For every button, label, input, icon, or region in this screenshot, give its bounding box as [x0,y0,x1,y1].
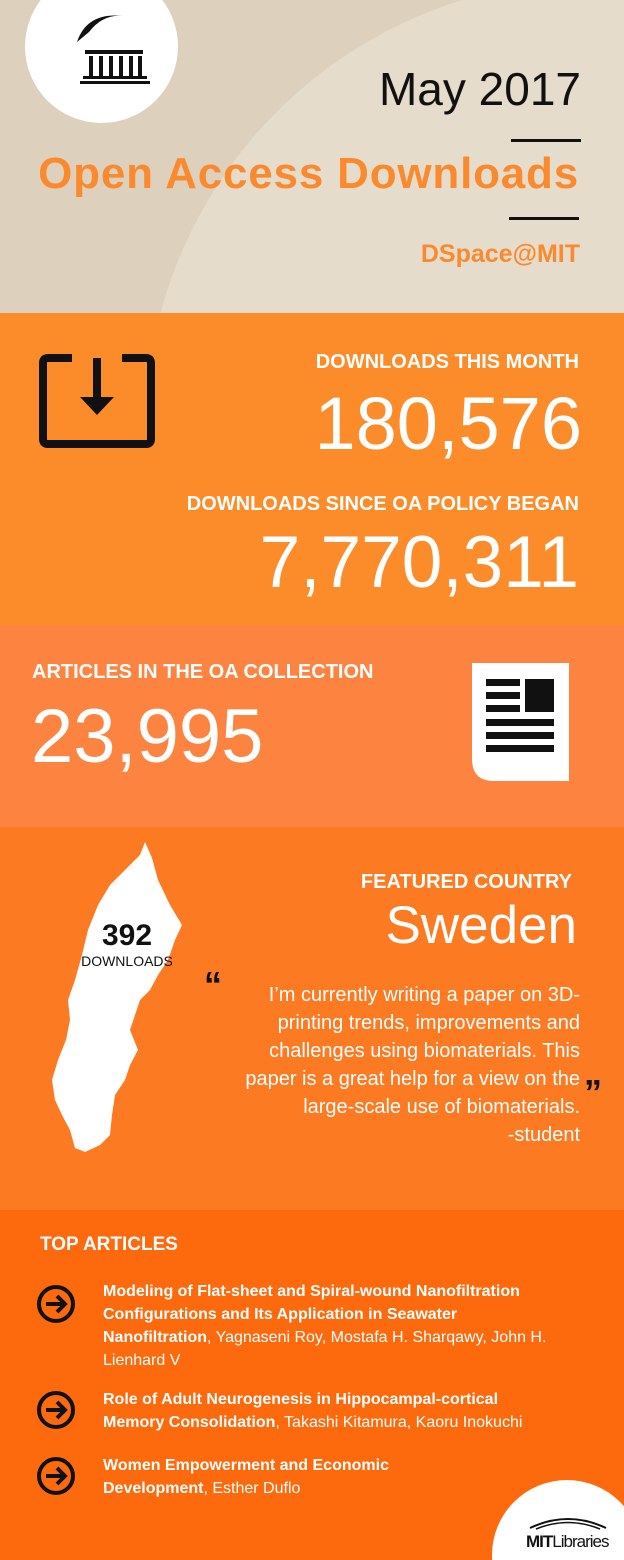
panel: featured country: ” [584,1072,602,1113]
article 1: Modeling of Flat-sheet and Spiral-wound Nanofiltration Configurations and Its Application in Seawater Nanofiltration, Yagnaseni Roy, Mostafa H. Sharqawy, John H. Lienhard V [103,1283,546,1369]
stat: since policy: DOWNLOADS SINCE OA POLICY BEGAN [187,493,579,515]
title: Open Access Downloads [38,149,579,198]
map: Sweden [52,842,182,1152]
article 3: Women Empowerment and Economic Development, Esther Duflo [103,1457,389,1497]
icon: document [472,663,569,781]
panel: articles: 23,995 [31,694,263,779]
stat: 392 downloads: 392 [102,919,152,952]
quote: large-scale use of biomaterials. [303,1096,580,1118]
stat: 392 downloads [81,919,173,969]
quote: challenges using biomaterials. This [269,1040,580,1062]
quote: “ [204,964,222,1005]
subtitle: DSpace@MIT [421,240,580,268]
quote [204,964,602,1146]
quote: I’m currently writing a paper on 3D- [269,984,580,1006]
header panel [0,0,624,313]
date heading: May 2017 [379,63,581,115]
logo: MIT Libraries: MITLibraries [526,1532,608,1551]
icon: arrow [37,1285,75,1323]
heading: TOP ARTICLES [40,1234,178,1255]
panel: downloads: 7,770,311 [260,522,579,603]
icon: MIT dome logo [25,0,178,123]
panel: downloads [0,313,624,625]
panel: featured country [0,827,624,1210]
stat: articles: ARTICLES IN THE OA COLLECTION [32,661,373,683]
icon: download [39,354,155,448]
logo: MIT Libraries [492,1480,624,1560]
quote: paper is a great help for a view on the [245,1068,580,1090]
quote: -student [508,1124,580,1146]
panel: top articles [0,1210,624,1560]
panel: articles [0,625,624,827]
panel: downloads: 180,576 [314,382,582,465]
heading: featured country: FEATURED COUNTRY [361,871,572,893]
article 2: Role of Adult Neurogenesis in Hippocampal-cortical Memory Consolidation, Takashi Kitamura, Kaoru Inokuchi [103,1391,522,1431]
quote: printing trends, improvements and [278,1012,580,1034]
stat: downloads this month: DOWNLOADS THIS MONTH [316,351,579,373]
panel: featured country: Sweden [385,896,577,955]
stat: 392 downloads: DOWNLOADS [81,953,173,969]
